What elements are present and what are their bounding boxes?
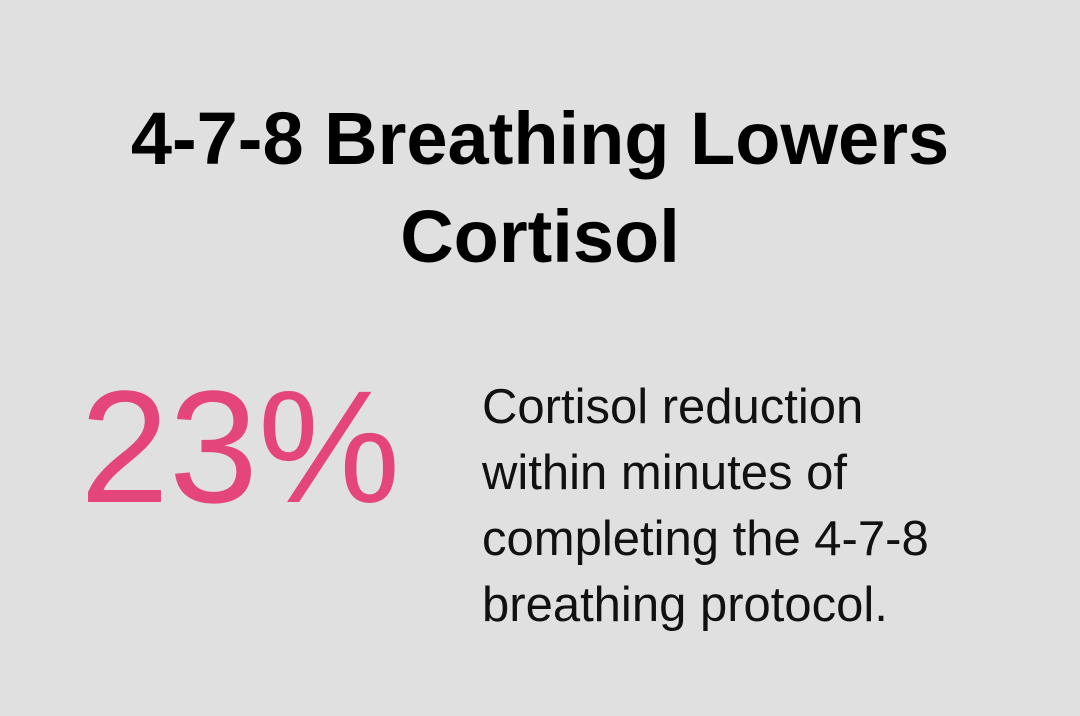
title: Cortisol [400,195,680,278]
title: 4-7-8 Breathing Lowers [131,97,949,180]
big stat: 23% [80,357,400,536]
description: breathing protocol. [482,578,888,632]
description [482,380,929,632]
title [131,97,949,278]
description: completing the 4-7-8 [482,512,929,566]
description: within minutes of [482,446,847,500]
description: Cortisol reduction [482,380,863,434]
